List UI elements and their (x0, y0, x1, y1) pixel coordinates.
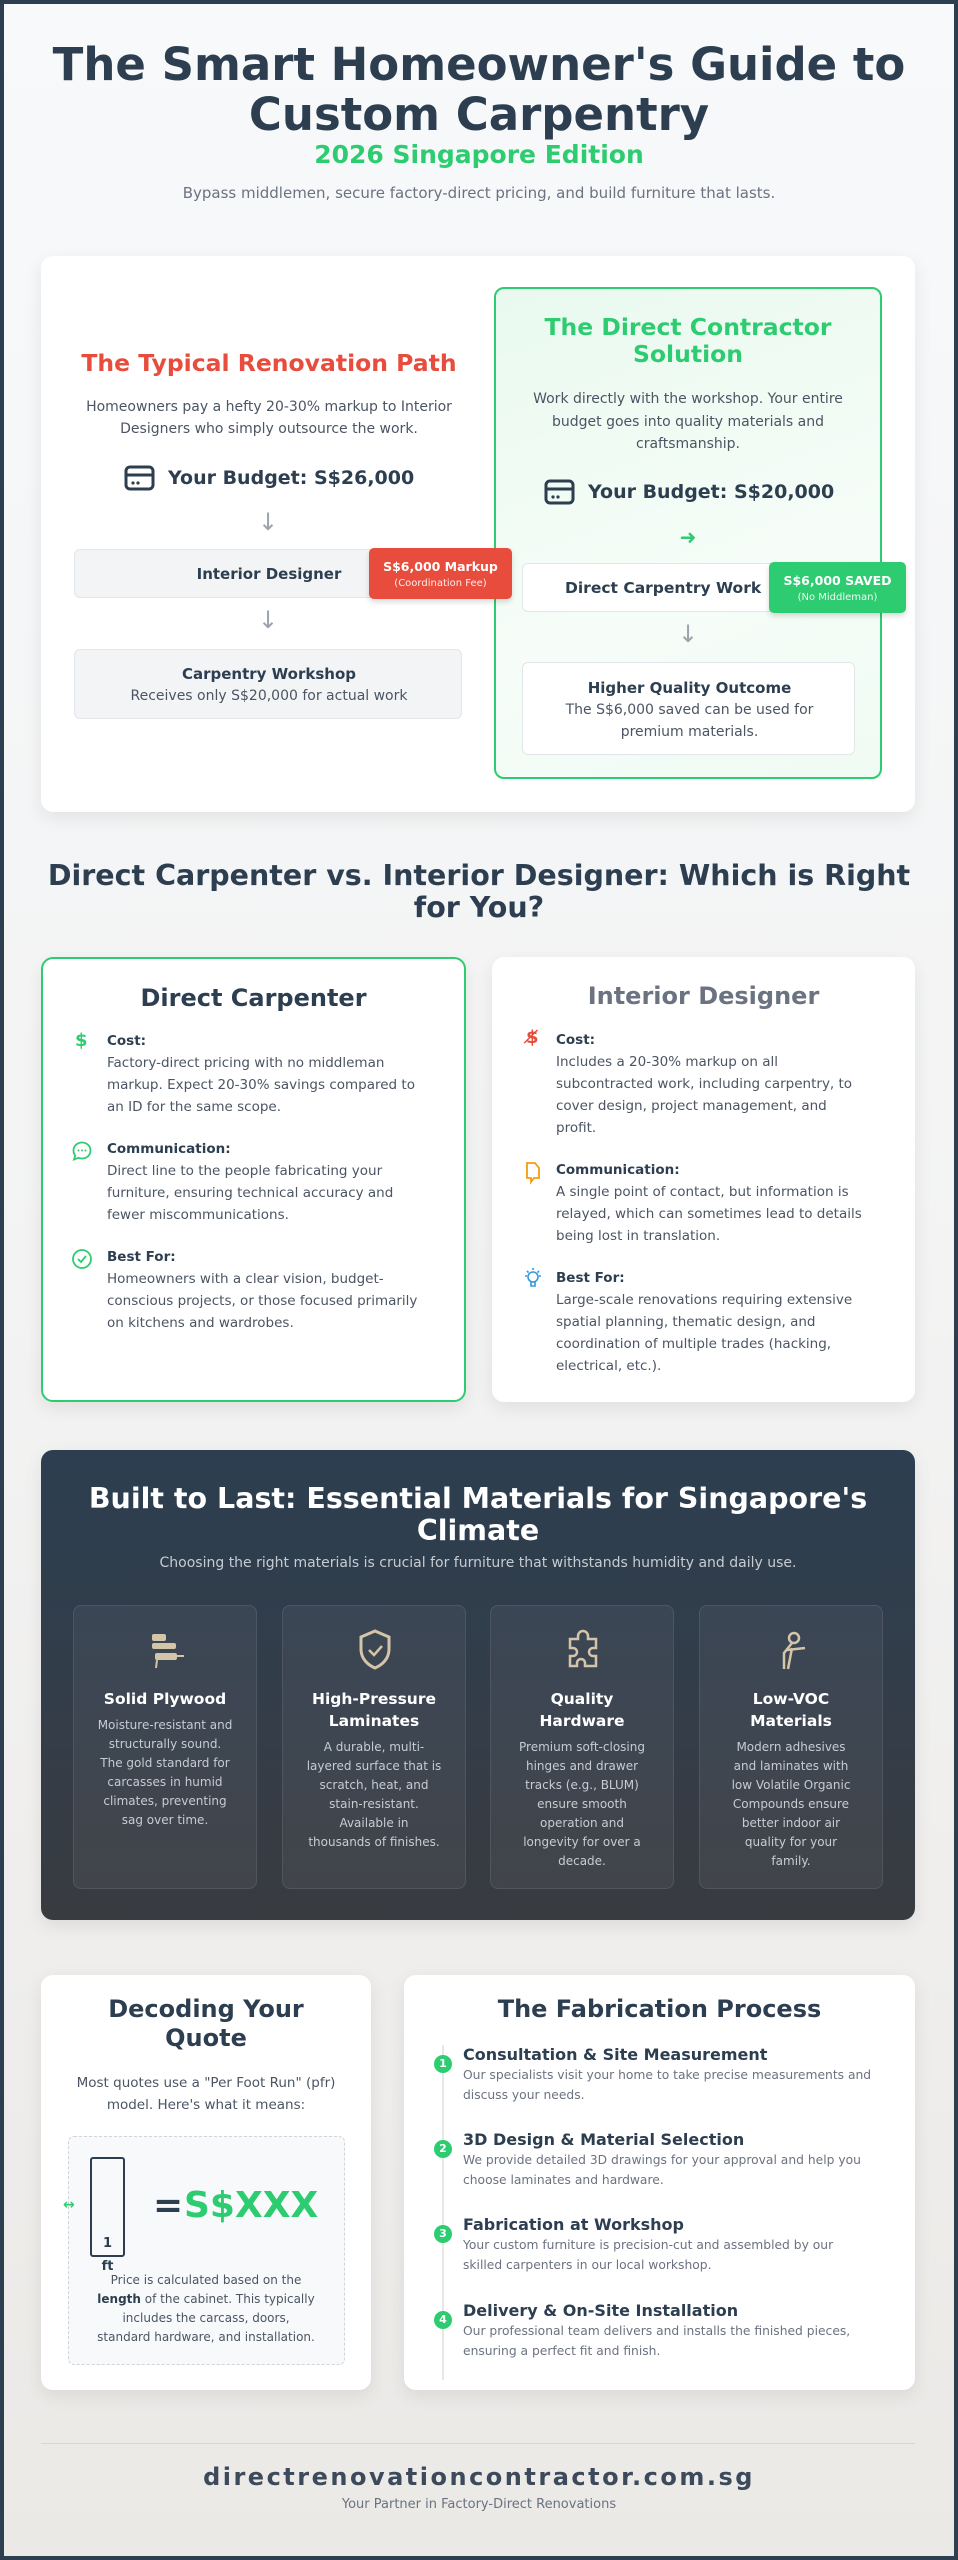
tile: low-voc: Materials (750, 1712, 832, 1730)
item: cost: cover design, project management, and (556, 1098, 827, 1114)
badge: markup (369, 548, 512, 599)
heading: comparison: Direct Carpenter vs. Interior Designer: Which is Right (48, 859, 910, 892)
tile: plywood (73, 1605, 257, 1889)
step 2 (434, 2130, 861, 2186)
heading: process: The Fabrication Process (498, 1995, 821, 2023)
step 3: skilled carpenters in our local workshop. (463, 2258, 712, 2272)
box: carpentry workshop: Carpentry Workshop (182, 665, 356, 683)
heading: direct solution: The Direct Contractor (544, 313, 832, 341)
tile: hardware: operation and (540, 1816, 624, 1830)
text: price explanation: Price is calculated based on the (111, 2273, 301, 2287)
item: cost: profit. (556, 1120, 596, 1136)
tile: plywood: carcasses in humid (107, 1775, 223, 1789)
tile: low-voc: and laminates with (734, 1759, 848, 1773)
item: cost: Factory-direct pricing with no middleman (107, 1055, 384, 1071)
step 2: 3D Design & Material Selection (463, 2130, 744, 2149)
box: higher quality: The S$6,000 saved can be used for premium materials. (566, 702, 813, 740)
icon: person (782, 1632, 806, 1670)
item: best for: Best For: (556, 1270, 625, 1286)
step 2: 2 (439, 2142, 447, 2155)
box: direct carpentry work: Direct Carpentry Work (565, 579, 761, 597)
text: materials subtitle: Choosing the right materials is crucial for furniture that withstands humidity and daily use. (160, 1555, 796, 1571)
item: best for: Homeowners with a clear vision, budget- (107, 1271, 384, 1287)
text: direct description: Work directly with the workshop. Your entire budget goes into quality materials and craftsmanship. (533, 391, 843, 452)
icon: crossed dollar: $̸ (526, 1027, 539, 1048)
item: communication: furniture, ensuring technical accuracy and (107, 1185, 393, 1201)
item: best for: electrical, etc.). (556, 1358, 661, 1374)
item: best for: coordination of multiple trades (hacking, (556, 1336, 831, 1352)
cabinet (90, 2157, 125, 2257)
heading: quote: Quote (165, 2024, 247, 2052)
heading: quote (108, 1995, 304, 2052)
tile: laminates: stain-resistant. (329, 1797, 419, 1811)
heading: materials (89, 1482, 867, 1547)
panel: materials (41, 1450, 915, 1920)
left column: typical path (81, 349, 457, 490)
icon: note (526, 1162, 540, 1185)
budget: S$26,000: Your Budget: S$26,000 (168, 467, 414, 489)
icon: chat (72, 1142, 92, 1161)
item: communication (526, 1162, 862, 1244)
item: best for: Best For: (107, 1249, 176, 1265)
budget: S$20,000: Your Budget: S$20,000 (588, 481, 834, 503)
tile: plywood: sag over time. (122, 1813, 208, 1827)
timeline (442, 2045, 444, 2380)
tile: plywood: The gold standard for (100, 1756, 230, 1770)
box: interior designer: Interior Designer (197, 565, 341, 583)
tile: hardware: decade. (558, 1854, 606, 1868)
step 1: discuss your needs. (463, 2088, 585, 2102)
tile: plywood: Moisture-resistant and (98, 1718, 232, 1732)
step 4: 4 (439, 2313, 447, 2326)
item: best for: conscious projects, or those focused primarily (107, 1293, 417, 1309)
item: communication: A single point of contact, but information is (556, 1184, 849, 1200)
heading: materials: Climate (417, 1514, 539, 1547)
title: Custom Carpentry (249, 88, 709, 141)
tile: plywood: Solid Plywood (104, 1690, 226, 1708)
tile: hardware: Quality (551, 1690, 613, 1708)
tile: hardware: Hardware (539, 1712, 625, 1730)
icon: dollar: $ (75, 1030, 88, 1051)
heading: comparison: for You? (414, 891, 544, 924)
item: communication: Communication: (556, 1162, 680, 1178)
tile: hardware: hinges and drawer (526, 1759, 638, 1773)
heading: materials: Built to Last: Essential Materials for Singapore's (89, 1482, 867, 1515)
step 4 (434, 2301, 850, 2358)
diagram: per foot run: 1 (103, 2236, 112, 2251)
item: cost (524, 1027, 852, 1136)
box: carpentry workshop: Receives only S$20,000 for actual work (130, 688, 408, 704)
heading: quote: Decoding Your (108, 1995, 304, 2023)
diagram: per foot run (68, 2136, 345, 2365)
text: price explanation: includes the carcass, doors, (122, 2311, 290, 2325)
heading: direct solution (544, 313, 832, 368)
panel: interior designer (492, 957, 915, 1402)
item: cost: subcontracted work, including carpentry, to (556, 1076, 852, 1092)
icon: plywood (152, 1634, 184, 1668)
tile: low-voc: better indoor air (742, 1816, 840, 1830)
text: typical path description (86, 399, 452, 437)
icon: width arrow: ↔ (63, 2197, 75, 2213)
panel: direct contractor solution (494, 287, 882, 779)
item: best for: on kitchens and wardrobes. (107, 1315, 294, 1331)
tile: hardware: ensure smooth (537, 1797, 627, 1811)
diagram: per foot run: S$XXX (184, 2185, 318, 2226)
icon: check (72, 1249, 92, 1269)
footer: tagline: Your Partner in Factory-Direct Renovations (342, 2497, 616, 2512)
tile: plywood: structurally sound. (109, 1737, 221, 1751)
item: cost: markup. Expect 20-30% savings compared to (107, 1077, 415, 1093)
box: interior designer (74, 549, 462, 598)
heading: Interior Designer (588, 982, 819, 1010)
subtitle: 2026 Singapore Edition (314, 140, 644, 169)
tile: low-voc: low Volatile Organic (732, 1778, 850, 1792)
step 3: Fabrication at Workshop (463, 2215, 684, 2234)
badge: markup: S$6,000 Markup (383, 559, 498, 574)
tile: hardware: longevity for over a (523, 1835, 641, 1849)
icon: shield (360, 1629, 390, 1670)
item: communication (72, 1141, 393, 1223)
badge: markup: (Coordination Fee) (394, 578, 487, 589)
badge: saved (769, 562, 906, 613)
step 4: ensuring a perfect fit and finish. (463, 2344, 660, 2358)
item: cost (75, 1030, 415, 1115)
box: direct carpentry work (522, 563, 855, 612)
arrow: down 2: ↓ (258, 606, 278, 634)
title: The Smart Homeowner's Guide to (53, 38, 905, 91)
icon: puzzle (568, 1630, 598, 1668)
step 4: Delivery & On-Site Installation (463, 2301, 738, 2320)
item: cost: Cost: (556, 1032, 595, 1048)
step 1: Our specialists visit your home to take precise measurements and (463, 2068, 871, 2082)
panel: direct carpenter (41, 957, 466, 1402)
tile: laminates: High-Pressure (312, 1690, 436, 1708)
tile: laminates: layered surface that is (307, 1759, 441, 1773)
footer: website: directrenovationcontractor.com.sg (203, 2463, 755, 2491)
tile: laminates: A durable, multi- (324, 1740, 424, 1754)
item: communication: Communication: (107, 1141, 231, 1157)
tile: laminates (282, 1605, 466, 1889)
price formula: = (153, 2185, 183, 2226)
tile: low-voc: Modern adhesives (736, 1740, 846, 1754)
tile: low-voc: quality for your (745, 1835, 837, 1849)
tile: plywood: climates, preventing (103, 1794, 227, 1808)
text: price explanation: length of the cabinet. This typically (97, 2292, 315, 2306)
step 3 (434, 2215, 834, 2272)
item: best for (72, 1249, 417, 1331)
panel: comparison paths (41, 256, 915, 812)
heading: direct solution: Solution (633, 340, 743, 368)
step 4: Our professional team delivers and installs the finished pieces, (463, 2324, 850, 2338)
heading: typical path: The Typical Renovation Path (81, 349, 457, 377)
tile: hardware (490, 1605, 674, 1889)
item: best for: spatial planning, thematic design, and (556, 1314, 816, 1330)
tile: low-voc: Compounds ensure (733, 1797, 849, 1811)
panel: decoding quote (41, 1975, 371, 2390)
tile: hardware: tracks (e.g., BLUM) (525, 1778, 639, 1792)
step 2: choose laminates and hardware. (463, 2172, 664, 2186)
tile: laminates: scratch, heat, and (320, 1778, 428, 1792)
step 3: Your custom furniture is precision-cut and assembled by our (463, 2238, 833, 2252)
step 2: We provide detailed 3D drawings for your approval and help you (463, 2153, 861, 2167)
item: cost: Cost: (107, 1033, 146, 1049)
panel: fabrication process (404, 1975, 915, 2390)
icon: bulb (525, 1268, 541, 1287)
step 1: 1 (439, 2057, 447, 2070)
text: typical path description: Designers who simply outsource the work. (120, 421, 418, 437)
tagline: Bypass middlemen, secure factory-direct pricing, and build furniture that lasts. (183, 184, 775, 202)
text: price explanation (97, 2273, 315, 2344)
arrow: down 3: ↓ (678, 620, 698, 648)
heading: Direct Carpenter (140, 984, 367, 1012)
tile: low-voc: family. (771, 1854, 811, 1868)
step 1 (434, 2045, 871, 2102)
step 3: 3 (439, 2227, 447, 2240)
tile: laminates: Available in (339, 1816, 409, 1830)
tile: laminates: thousands of finishes. (308, 1835, 440, 1849)
item: communication: being lost in translation. (556, 1228, 720, 1244)
box: higher quality: Higher Quality Outcome (588, 679, 791, 697)
box: carpentry workshop (74, 649, 462, 719)
tile: low-voc: Low-VOC (753, 1690, 829, 1708)
tile: hardware: Premium soft-closing (519, 1740, 645, 1754)
arrow: down 1: ↓ (258, 508, 278, 536)
arrow: green right: ➜ (680, 525, 696, 549)
text: typical path description: Homeowners pay a hefty 20-30% markup to Interior (86, 399, 452, 415)
item: cost: an ID for the same scope. (107, 1099, 281, 1115)
step 1: Consultation & Site Measurement (463, 2045, 767, 2064)
tile: low-voc (699, 1605, 883, 1889)
item: communication: Direct line to the people fabricating your (107, 1163, 382, 1179)
box: higher quality (522, 662, 855, 755)
item: best for (525, 1268, 852, 1374)
badge: saved: (No Middleman) (798, 592, 877, 603)
diagram: per foot run: ft (102, 2259, 113, 2274)
title (52, 38, 905, 141)
item: best for: Large-scale renovations requiring extensive (556, 1292, 852, 1308)
badge: saved: S$6,000 SAVED (783, 573, 892, 588)
item: cost: Includes a 20-30% markup on all (556, 1054, 778, 1070)
text: pfr description: Most quotes use a "Per Foot Run" (pfr) model. Here's what it means: (77, 2075, 335, 2113)
tile: laminates: Laminates (329, 1712, 419, 1730)
item: communication: relayed, which can sometimes lead to details (556, 1206, 862, 1222)
text: price explanation: standard hardware, and installation. (97, 2330, 315, 2344)
item: communication: fewer miscommunications. (107, 1207, 289, 1223)
heading: comparison (48, 859, 910, 924)
